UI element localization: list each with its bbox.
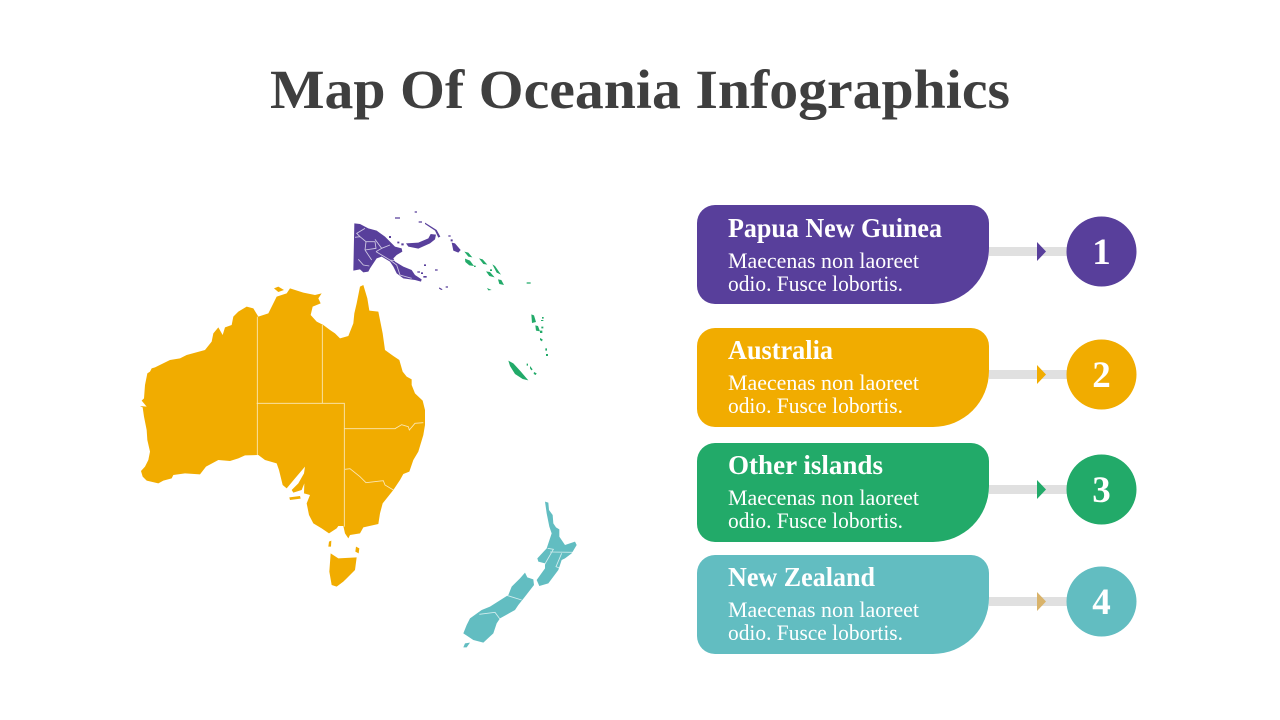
title: Map Of Oceania Infographics [270, 59, 1010, 120]
connector 2 [989, 365, 1069, 384]
connector 1 [989, 242, 1069, 261]
number badge 3 [1066, 454, 1136, 524]
connector 4 [989, 592, 1069, 611]
card 4: Maecenas non laoreet [728, 597, 919, 622]
number badge 2: 2 [1092, 355, 1111, 396]
card 4: odio. Fusce lobortis. [728, 620, 903, 645]
card 1: Papua New Guinea [728, 213, 942, 243]
number badge 4 [1066, 566, 1136, 636]
item 4: New Zealand [697, 555, 1136, 654]
card 2: odio. Fusce lobortis. [728, 393, 903, 418]
card 2: Maecenas non laoreet [728, 370, 919, 395]
card 4 [697, 555, 989, 654]
number badge 2 [1066, 340, 1136, 410]
connector 3 [989, 480, 1069, 499]
number badge 3: 3 [1092, 470, 1111, 511]
card 1 [697, 205, 989, 304]
map: New Zealand [463, 502, 577, 647]
card 4: New Zealand [728, 562, 875, 592]
card 3: Maecenas non laoreet [728, 485, 919, 510]
card 3: Other islands [728, 450, 883, 480]
item 3: Other islands [697, 443, 1136, 542]
item 2: Australia [697, 328, 1136, 427]
map: Papua New Guinea [353, 211, 461, 290]
item 1: Papua New Guinea [697, 205, 1136, 304]
map: other islands [464, 252, 548, 380]
number badge 1: 1 [1092, 232, 1111, 273]
card 1: odio. Fusce lobortis. [728, 271, 903, 296]
card 1: Maecenas non laoreet [728, 248, 919, 273]
card 3: odio. Fusce lobortis. [728, 508, 903, 533]
number badge 4: 4 [1092, 582, 1111, 623]
card 2: Australia [728, 335, 833, 365]
map: Australia [140, 285, 425, 587]
number badge 1 [1066, 216, 1136, 286]
card 2 [697, 328, 989, 427]
card 3 [697, 443, 989, 542]
map of Oceania [140, 211, 577, 647]
